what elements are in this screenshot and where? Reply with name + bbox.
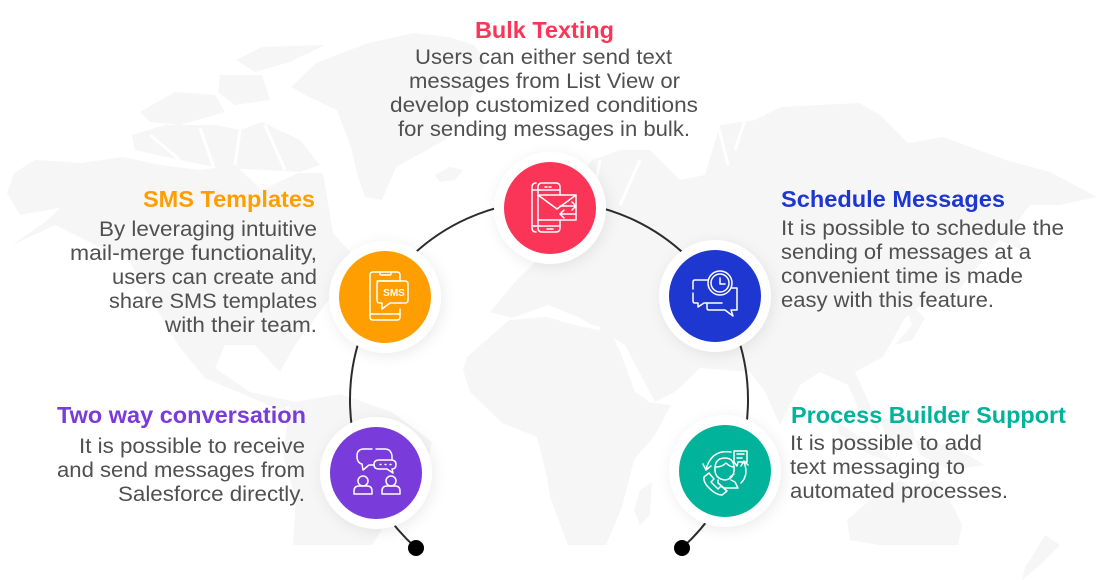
panel: bulk texting xyxy=(390,17,698,141)
text block: sms templates: with their team. xyxy=(164,314,317,337)
text block: schedule messages xyxy=(781,217,1064,312)
panel: schedule messages xyxy=(781,186,1064,312)
heading: schedule messages: Schedule Messages xyxy=(781,186,1005,212)
text block: schedule messages: convenient time is made xyxy=(781,265,1023,288)
text block: process builder support: text messaging to xyxy=(790,456,965,479)
text block: process builder support xyxy=(790,432,1008,503)
text block: two way conversation xyxy=(57,435,305,506)
text block: bulk texting xyxy=(390,46,698,141)
text block: process builder support: It is possible to add xyxy=(790,432,982,455)
icon: sms templates badge: SMS xyxy=(383,288,405,299)
panel: process builder support xyxy=(790,402,1066,503)
map coast cuts xyxy=(150,120,745,402)
text block: schedule messages: It is possible to schedule the xyxy=(781,217,1064,240)
heading: two way conversation: Two way conversation xyxy=(57,402,306,428)
panel: two way conversation xyxy=(57,402,306,506)
panel: sms templates xyxy=(70,186,317,337)
text block: schedule messages: easy with this feature. xyxy=(781,289,994,312)
icon: sms templates badge xyxy=(329,241,441,353)
icon: bulk texting badge xyxy=(494,152,606,264)
heading: bulk texting: Bulk Texting xyxy=(475,17,614,43)
text block: sms templates: By leveraging intuitive xyxy=(99,218,317,241)
icon: process builder support badge xyxy=(669,415,781,527)
text block: bulk texting: for sending messages in bulk. xyxy=(398,118,690,141)
text block: process builder support: automated processes. xyxy=(790,480,1008,503)
text block: sms templates xyxy=(70,218,317,337)
text block: bulk texting: develop customized conditions xyxy=(390,94,698,117)
icon: schedule messages badge xyxy=(659,240,771,352)
heading: process builder support: Process Builder Support xyxy=(791,402,1066,428)
text block: sms templates: share SMS templates xyxy=(109,290,317,313)
text block: bulk texting: messages from List View or xyxy=(409,70,680,93)
text block: two way conversation: It is possible to receive xyxy=(79,435,305,458)
text block: two way conversation: and send messages from xyxy=(57,459,305,482)
heading: sms templates: SMS Templates xyxy=(143,186,315,212)
text block: two way conversation: Salesforce directly. xyxy=(118,483,305,506)
text block: sms templates: users can create and xyxy=(112,266,317,289)
text block: sms templates: mail-merge functionality, xyxy=(70,242,317,265)
text block: schedule messages: sending of messages at a xyxy=(781,241,1031,264)
connecting arc with end dots xyxy=(350,201,748,556)
text block: bulk texting: Users can either send text xyxy=(415,46,672,69)
icon: two way conversation badge xyxy=(320,417,432,529)
